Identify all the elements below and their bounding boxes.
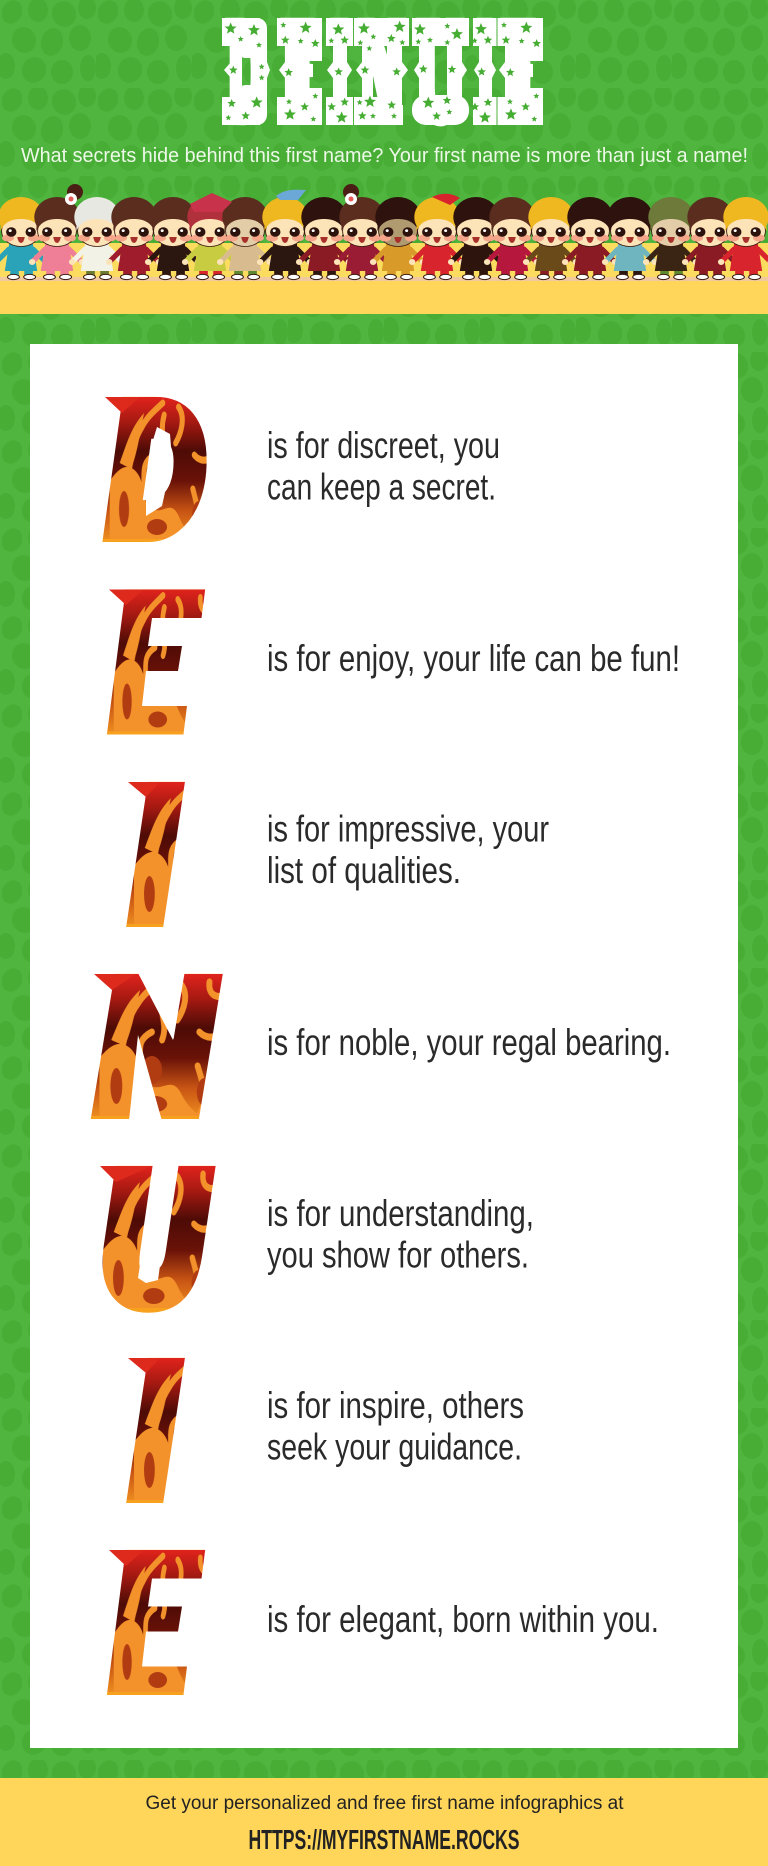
- description I: is for impressive, your: [267, 808, 549, 850]
- fire letter U: U: [103, 1138, 206, 1338]
- description U: is for understanding,: [267, 1193, 534, 1234]
- fire letter E: E: [114, 1523, 197, 1723]
- yellow banner band: [0, 243, 768, 314]
- header title: [222, 0, 543, 154]
- footer band: [0, 1778, 768, 1866]
- fire letter I: I: [134, 754, 175, 954]
- description N: is for noble, your regal bearing.: [267, 1022, 671, 1063]
- white card panel: [30, 344, 738, 1748]
- row 6: letter I: [128, 1330, 524, 1530]
- description E second: is for elegant, born within you.: [267, 1599, 659, 1640]
- description D: can keep a secret.: [267, 466, 496, 508]
- description I: list of qualities.: [267, 850, 461, 891]
- row 7: letter E: [109, 1523, 659, 1723]
- footer url: HTTPS://MYFIRSTNAME.ROCKS: [248, 1824, 520, 1855]
- row 2: letter E: [109, 562, 680, 762]
- subtitle: What secrets hide behind this first name? Your first name is more than just a name!: [21, 145, 748, 167]
- row 5: letter U: [100, 1138, 534, 1338]
- description D: is for discreet, you: [267, 425, 500, 466]
- row 1: letter D: [105, 370, 500, 570]
- fire letter D: D: [110, 370, 202, 570]
- description U: you show for others.: [267, 1234, 529, 1276]
- footer text: Get your personalized and free first name infographics at: [146, 1793, 624, 1814]
- fire letter E: E: [114, 562, 197, 762]
- description I second: is for inspire, others: [267, 1385, 524, 1426]
- description I second: [267, 1385, 524, 1468]
- title letters: [222, 0, 543, 154]
- description U: [267, 1193, 534, 1276]
- description D: [267, 425, 500, 508]
- description I second: seek your guidance.: [267, 1426, 522, 1468]
- row 3: letter I: [128, 754, 549, 954]
- row of cartoon children: [0, 184, 768, 280]
- fire letter N: N: [99, 947, 212, 1147]
- description I: [267, 808, 549, 891]
- fire letter I: I: [134, 1330, 175, 1530]
- row 4: letter N: [94, 947, 671, 1147]
- title stars: [225, 21, 541, 123]
